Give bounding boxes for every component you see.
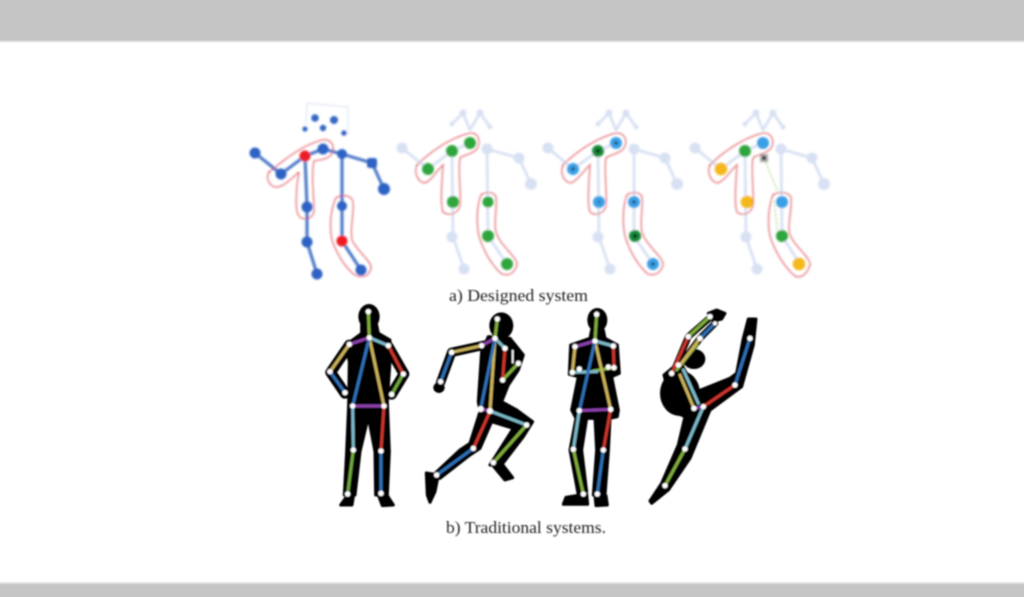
coloured bones xyxy=(437,319,527,475)
head keypoints xyxy=(302,114,347,136)
red joints xyxy=(300,150,348,246)
panel: designed system skeleton diagrams xyxy=(250,103,830,280)
joints xyxy=(327,309,406,497)
faint skeleton xyxy=(396,110,537,274)
figure 2: green keypoints xyxy=(396,110,537,275)
red dashed regions xyxy=(268,140,333,219)
figure 4: clustered keypoints xyxy=(690,110,830,277)
head keypoints box xyxy=(306,103,348,135)
green joints xyxy=(422,137,513,270)
green joints xyxy=(739,145,788,242)
silhouette: running man xyxy=(426,312,533,502)
faint skeleton xyxy=(690,110,830,274)
top grey band xyxy=(0,0,1024,42)
silhouette: front standing man xyxy=(327,304,406,506)
small square marker xyxy=(760,154,768,162)
figure 3: blue and dark green keypoints xyxy=(542,110,683,275)
silhouette: standing woman xyxy=(563,308,619,506)
body xyxy=(426,312,533,502)
joints xyxy=(434,316,529,478)
red dashed regions xyxy=(709,133,773,214)
panel: traditional system silhouettes xyxy=(327,304,756,506)
yellow joints xyxy=(715,163,805,270)
coloured bones xyxy=(330,312,403,494)
dashed green link xyxy=(764,158,778,236)
red dashed regions xyxy=(416,133,479,214)
coloured bones xyxy=(572,314,614,494)
figure 1: full blue skeleton xyxy=(250,103,390,280)
joints xyxy=(250,144,390,280)
joint numbers xyxy=(572,142,654,266)
caption: designed system: a) Designed system xyxy=(449,286,588,305)
joints xyxy=(570,312,617,497)
body xyxy=(650,310,756,503)
caption: traditional systems: b) Traditional systems. xyxy=(446,518,606,537)
blue joints xyxy=(567,137,659,270)
white arm highlight xyxy=(510,350,515,363)
skeleton bones xyxy=(255,149,384,274)
bottom grey band xyxy=(0,583,1024,597)
dark green joints xyxy=(592,145,641,242)
body xyxy=(331,304,404,506)
faint skeleton xyxy=(542,110,683,274)
body xyxy=(563,308,619,506)
blue joints xyxy=(757,137,788,208)
silhouette: leaping dancer xyxy=(650,310,756,503)
joints xyxy=(662,314,753,488)
coloured bones xyxy=(665,317,750,486)
red dashed regions xyxy=(562,133,626,214)
